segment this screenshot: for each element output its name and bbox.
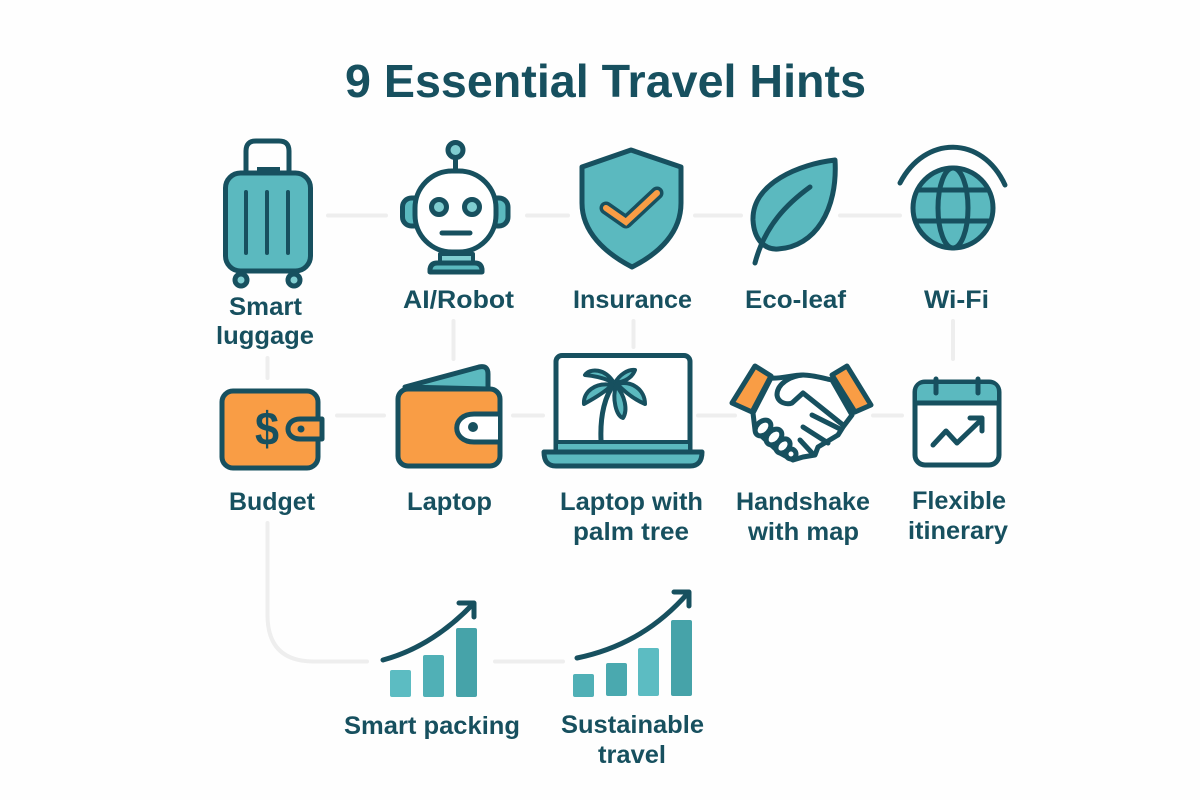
icon: insurance shield (582, 150, 681, 267)
icon: smart luggage (226, 141, 310, 286)
label: AI/Robot: AI/Robot (403, 286, 515, 314)
label: insurance: Insurance (573, 286, 692, 314)
label: handshake with map: with map (747, 518, 859, 546)
icon: budget wallet: $ (255, 402, 279, 455)
chart: smart packing growth bars (383, 603, 477, 697)
icon: Wi-Fi globe (900, 147, 1005, 248)
label: smart luggage (216, 293, 314, 350)
label: laptop with palm tree: Laptop with (560, 488, 703, 516)
label: laptop with palm tree: palm tree (573, 518, 689, 546)
label: flexible itinerary: Flexible (912, 487, 1006, 515)
label: flexible itinerary: itinerary (908, 517, 1008, 545)
label: eco-leaf: Eco-leaf (745, 286, 847, 314)
label: Wi-Fi: Wi-Fi (924, 286, 989, 314)
label: sustainable travel: Sustainable (561, 711, 704, 739)
label: smart packing: Smart packing (344, 712, 520, 740)
label: laptop: Laptop (407, 488, 492, 516)
label: laptop with palm tree (560, 488, 703, 546)
icon: budget wallet (222, 391, 322, 468)
icon: flexible itinerary calendar (915, 379, 999, 465)
icon: laptop with palm tree (544, 356, 702, 466)
label: budget: Budget (229, 488, 316, 516)
label: flexible itinerary (908, 487, 1008, 545)
label: handshake with map: Handshake (736, 488, 870, 516)
icon: eco leaf (753, 160, 835, 263)
chart: sustainable travel growth bars (573, 592, 692, 697)
icon: laptop wallet (398, 367, 500, 466)
title: 9 Essential Travel Hints (345, 55, 866, 107)
label: sustainable travel: travel (598, 741, 666, 769)
label: handshake with map (736, 488, 870, 546)
label: smart luggage: luggage (216, 322, 314, 350)
label: smart luggage: Smart (229, 293, 303, 321)
label: sustainable travel (561, 711, 704, 769)
icon: AI robot (402, 142, 508, 272)
icon: handshake (732, 366, 871, 460)
